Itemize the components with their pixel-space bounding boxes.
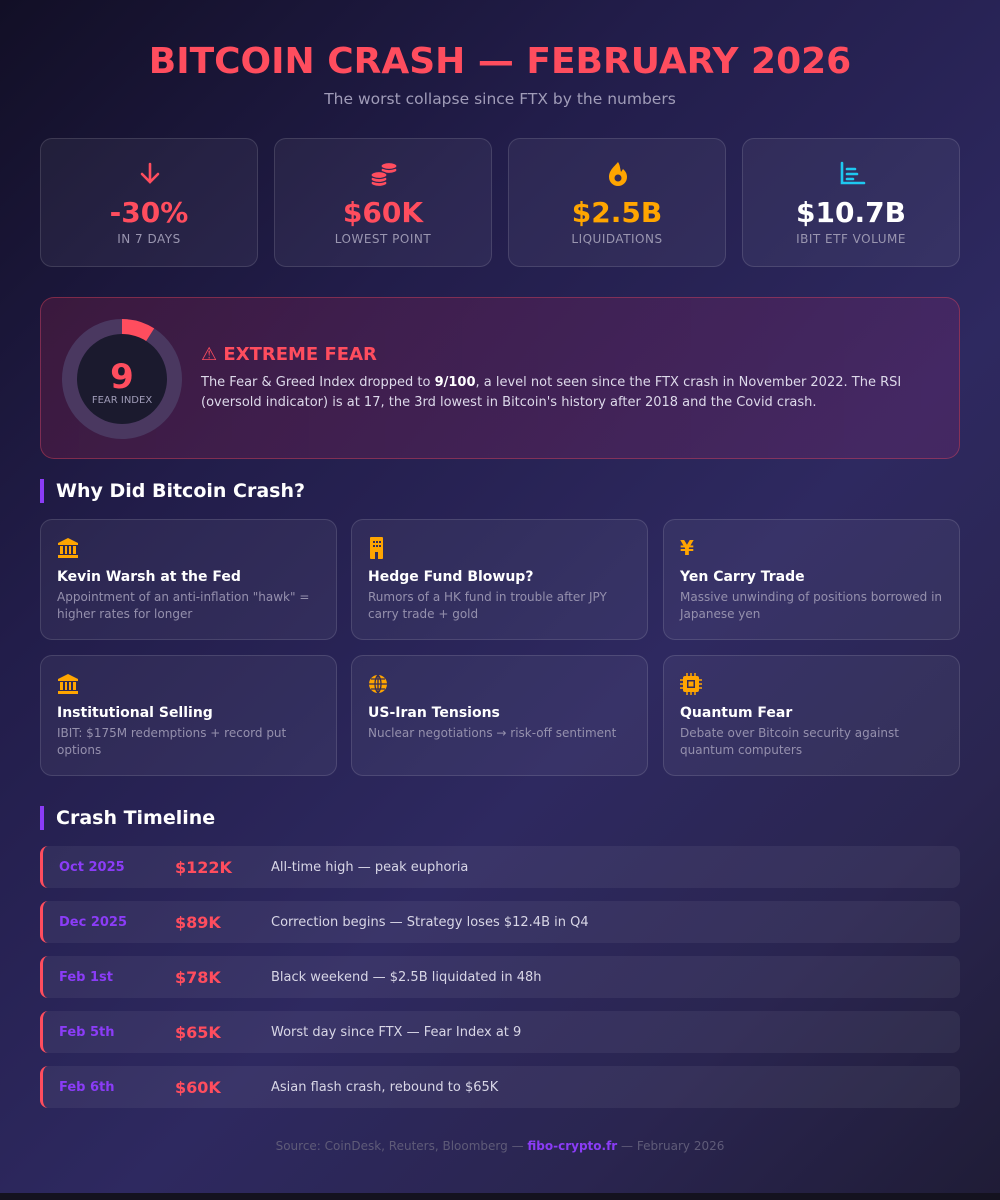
icon: bank bbox=[58, 538, 78, 558]
gauge: fear index 9: 9 bbox=[110, 357, 134, 397]
cause: institutional selling: Institutional Selling bbox=[57, 705, 213, 721]
timeline: Oct 2025 bbox=[40, 846, 960, 888]
icon: bank bbox=[58, 674, 78, 694]
subtitle: The worst collapse since FTX by the numbers bbox=[324, 90, 676, 108]
timeline: Feb 6th: Feb 6th bbox=[59, 1080, 115, 1095]
cause: Kevin Warsh bbox=[40, 519, 337, 640]
cause: institutional selling bbox=[40, 655, 337, 776]
timeline: Dec 2025: $89K bbox=[175, 913, 221, 932]
cause: US-Iran: Nuclear negotiations → risk-off sentiment bbox=[368, 726, 616, 740]
stat card: -30% bbox=[40, 138, 258, 267]
icon: bar chart bbox=[840, 162, 866, 184]
timeline: Oct 2025: $122K bbox=[175, 858, 232, 877]
footer: source: Source: CoinDesk, Reuters, Bloomberg — fibo-crypto.fr — February 2026 bbox=[276, 1139, 724, 1153]
icon: down arrow bbox=[140, 162, 160, 184]
cause: yen carry trade: Yen Carry Trade bbox=[680, 569, 805, 585]
cause: quantum fear bbox=[663, 655, 960, 776]
timeline: Feb 5th: Worst day since FTX — Fear Index at 9 bbox=[271, 1025, 521, 1040]
gauge: fear index 9: FEAR INDEX bbox=[92, 395, 152, 406]
icon: building bbox=[370, 537, 383, 559]
timeline: Dec 2025 bbox=[40, 901, 960, 943]
icon: coins bbox=[372, 163, 396, 186]
cause: Kevin Warsh: Appointment of an anti-inflation "hawk" = higher rates for longer bbox=[57, 590, 309, 621]
cause: Kevin Warsh: Kevin Warsh at the Fed bbox=[57, 569, 241, 585]
stat card: -30%: -30% bbox=[110, 196, 188, 229]
heading: crash timeline: Crash Timeline bbox=[56, 807, 215, 829]
stat card: $60K bbox=[274, 138, 492, 267]
cause: US-Iran: US-Iran Tensions bbox=[368, 705, 500, 721]
timeline: Feb 6th: $60K bbox=[175, 1078, 221, 1097]
stat card: $10.7B bbox=[742, 138, 960, 267]
title: BITCOIN CRASH — FEBRUARY 2026 bbox=[149, 41, 851, 82]
timeline: Dec 2025: Correction begins — Strategy loses $12.4B in Q4 bbox=[271, 915, 589, 930]
icon: chip bbox=[680, 673, 702, 695]
timeline: Oct 2025: Oct 2025 bbox=[59, 860, 125, 875]
stat card: -30%: IN 7 DAYS bbox=[117, 232, 181, 246]
timeline: Feb 1st: Feb 1st bbox=[59, 970, 113, 985]
icon: yen: ¥ bbox=[680, 536, 694, 560]
timeline: Feb 5th: $65K bbox=[175, 1023, 221, 1042]
timeline: Oct 2025: All-time high — peak euphoria bbox=[271, 860, 468, 875]
stat card: $2.5B: LIQUIDATIONS bbox=[571, 232, 663, 246]
timeline: Feb 6th bbox=[40, 1066, 960, 1108]
stat card: $60K: $60K bbox=[343, 196, 423, 229]
stat card: $2.5B bbox=[508, 138, 726, 267]
stat card: $10.7B: IBIT ETF VOLUME bbox=[796, 232, 906, 246]
cause: yen carry trade bbox=[663, 519, 960, 640]
stat card: $2.5B: $2.5B bbox=[572, 196, 662, 229]
timeline: Feb 5th: Feb 5th bbox=[59, 1025, 115, 1040]
stat card: $10.7B: $10.7B bbox=[796, 196, 906, 229]
heading: extreme fear: ⚠ EXTREME FEAR bbox=[201, 344, 377, 365]
timeline: Feb 1st: $78K bbox=[175, 968, 221, 987]
cause: quantum fear: Quantum Fear bbox=[680, 705, 792, 721]
timeline: Feb 1st: Black weekend — $2.5B liquidated in 48h bbox=[271, 970, 542, 985]
timeline: Feb 6th: Asian flash crash, rebound to $65K bbox=[271, 1080, 498, 1095]
panel: extreme fear bbox=[40, 297, 960, 459]
cause: hedge fund bbox=[351, 519, 648, 640]
cause: yen carry trade: Massive unwinding of positions borrowed in Japanese yen bbox=[680, 590, 942, 621]
timeline: Feb 1st bbox=[40, 956, 960, 998]
text: fear description: The Fear & Greed Index dropped to 9/100, a level not seen since the FTX crash in November 2022. The RSI (oversold indicator) is at 17, the 3rd lowest in Bitcoin's history after 2018 and the Covid crash. bbox=[201, 375, 901, 410]
cause: hedge fund: Rumors of a HK fund in trouble after JPY carry trade + gold bbox=[368, 590, 607, 621]
cause: quantum fear: Debate over Bitcoin security against quantum computers bbox=[680, 726, 899, 757]
icon: fire bbox=[609, 162, 627, 186]
icon: globe bbox=[369, 675, 387, 693]
gauge: fear index 9 bbox=[62, 319, 182, 439]
timeline: Feb 5th bbox=[40, 1011, 960, 1053]
cause: hedge fund: Hedge Fund Blowup? bbox=[368, 569, 533, 585]
timeline: Dec 2025: Dec 2025 bbox=[59, 915, 127, 930]
stat card: $60K: LOWEST POINT bbox=[335, 232, 431, 246]
cause: institutional selling: IBIT: $175M redemptions + record put options bbox=[57, 726, 286, 757]
heading: why did bitcoin crash: Why Did Bitcoin Crash? bbox=[56, 480, 305, 502]
cause: US-Iran bbox=[351, 655, 648, 776]
